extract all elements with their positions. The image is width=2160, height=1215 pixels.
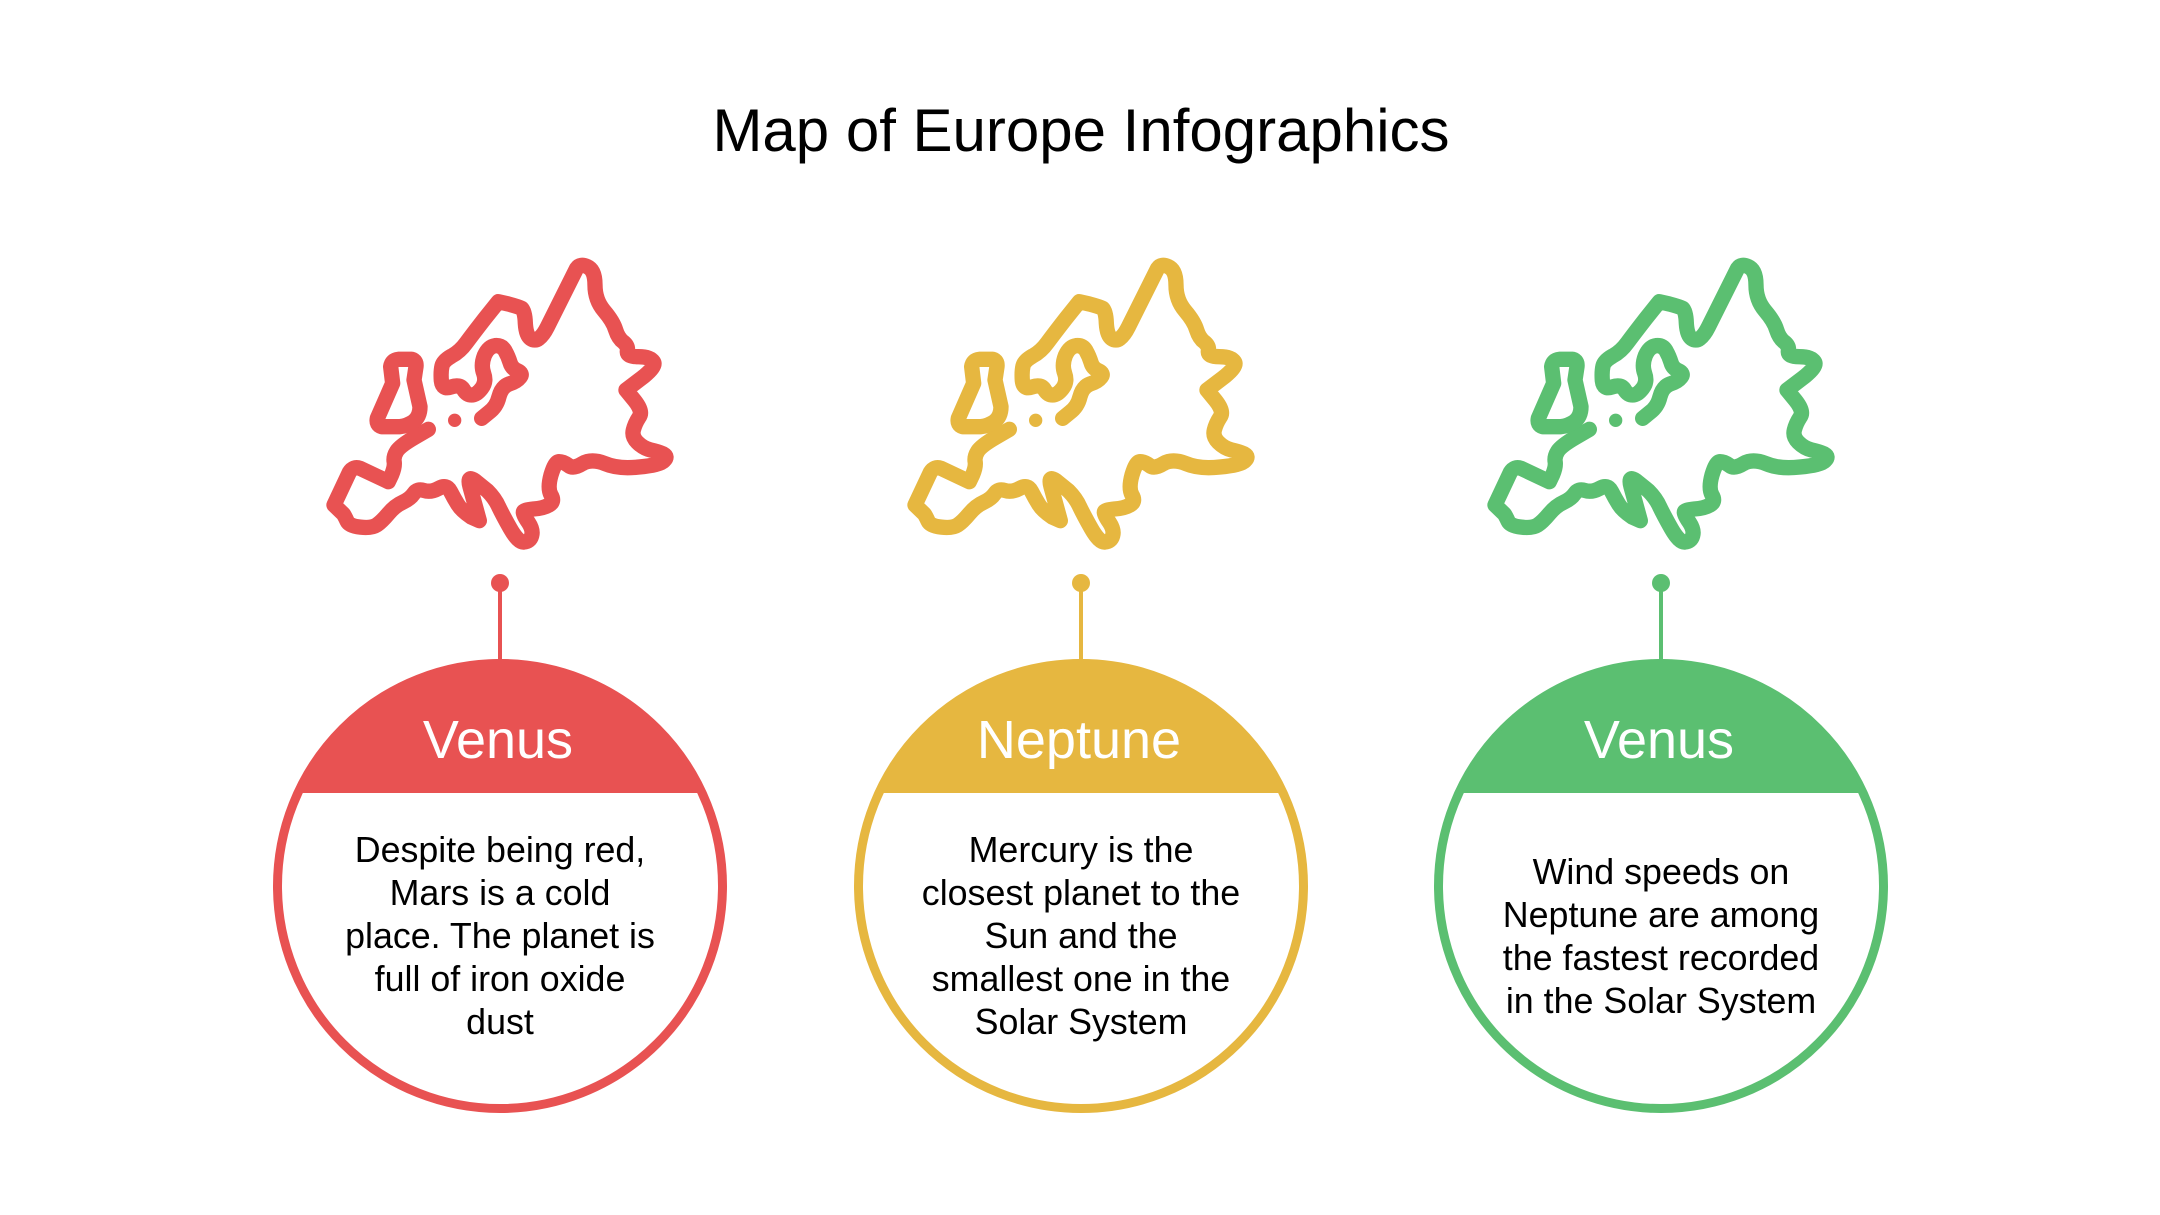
title: Map of Europe Infographics <box>712 97 1450 164</box>
heading band <box>880 659 1282 793</box>
body text: Mars is a cold <box>390 873 610 913</box>
heading band <box>299 659 701 793</box>
body text: Despite being red, <box>355 830 645 870</box>
connector with dot <box>1072 574 1090 663</box>
heading: Venus <box>423 710 573 770</box>
body text: smallest one in the <box>932 959 1230 999</box>
heading band <box>1460 659 1862 793</box>
circle outline <box>278 664 722 1108</box>
panel: Venus (green) <box>1438 265 1884 1108</box>
body text: the fastest recorded <box>1503 938 1819 978</box>
body text: Sun and the <box>984 916 1178 956</box>
connector with dot <box>1652 574 1670 663</box>
icon: green Europe map <box>1495 265 1827 542</box>
connector with dot <box>491 574 509 663</box>
panel: Venus (red) <box>278 265 722 1108</box>
icon: red Europe map <box>334 265 666 542</box>
body text: closest planet to the <box>922 873 1240 913</box>
heading: Venus <box>1584 710 1734 770</box>
body text: Mercury is the <box>969 830 1193 870</box>
circle outline <box>858 664 1304 1108</box>
body text: full of iron oxide <box>375 959 625 999</box>
body text: Solar System <box>975 1002 1187 1042</box>
heading: Neptune <box>977 710 1181 770</box>
body text: place. The planet is <box>345 916 655 956</box>
icon: yellow Europe map <box>915 265 1247 542</box>
body text: Wind speeds on <box>1533 852 1789 892</box>
body text: in the Solar System <box>1506 981 1816 1021</box>
body text: Neptune are among <box>1503 895 1819 935</box>
body text: dust <box>466 1002 534 1042</box>
panel: Neptune (yellow) <box>858 265 1304 1108</box>
circle outline <box>1438 664 1884 1108</box>
